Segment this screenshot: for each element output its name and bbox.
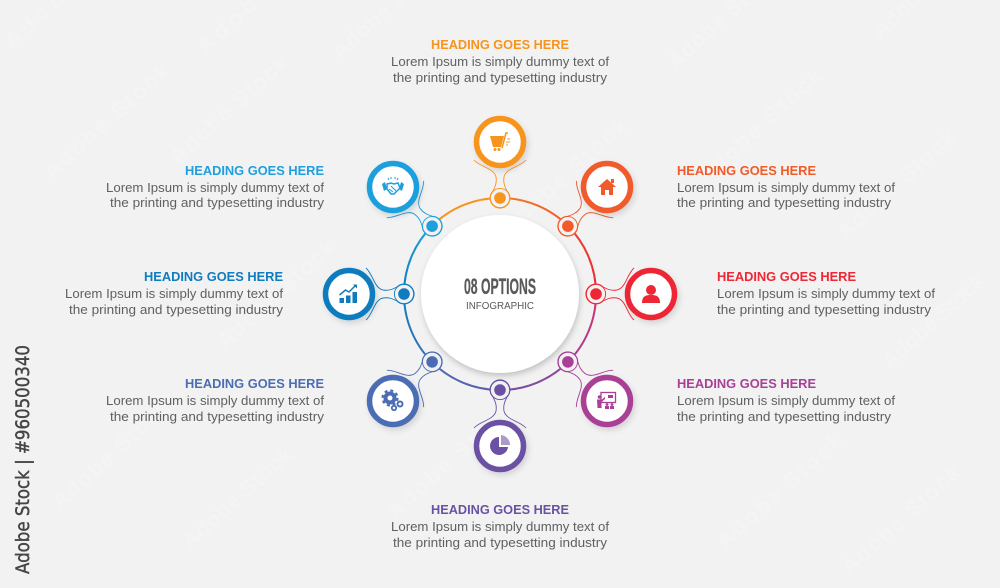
text block: top left: Lorem Ipsum is simply dummy text of — [106, 181, 325, 195]
center circle — [421, 215, 579, 373]
text block: right: Lorem Ipsum is simply dummy text of — [717, 287, 936, 301]
watermark pattern: Adobe Stock — [712, 428, 848, 554]
watermark pattern: Adobe Stock — [832, 124, 960, 244]
text block: bottom right: Lorem Ipsum is simply dummy text of — [677, 394, 896, 408]
text block: bottom left: the printing and typesetting industry — [110, 410, 325, 424]
watermark pattern: Adobe Stock — [39, 58, 175, 184]
text block: bottom: Lorem Ipsum is simply dummy text of — [391, 520, 610, 534]
text block: top right: HEADING GOES HERE — [677, 163, 816, 178]
text block: right — [717, 269, 936, 317]
icon: gears — [370, 378, 416, 424]
central ring — [404, 198, 596, 390]
text block: top left — [106, 163, 325, 210]
text block: top left: HEADING GOES HERE — [185, 163, 324, 178]
icon: pie chart — [476, 422, 524, 470]
text block: left: the printing and typesetting industry — [69, 303, 284, 317]
text block: top: HEADING GOES HERE — [431, 37, 569, 52]
text block: top: the printing and typesetting industry — [393, 71, 608, 85]
text block: top right — [677, 163, 896, 210]
watermark pattern: Adobe Stock — [47, 394, 175, 514]
text block: top right: Lorem Ipsum is simply dummy text of — [677, 181, 896, 195]
icon: growth chart — [326, 270, 372, 318]
text block: right: the printing and typesetting industry — [717, 303, 932, 317]
watermark pattern: Adobe Stock — [837, 459, 965, 579]
watermark pattern: Adobe Stock — [877, 268, 991, 374]
text block: bottom left: HEADING GOES HERE — [185, 376, 324, 391]
icon: presentation — [584, 378, 630, 424]
connector: right — [586, 268, 634, 320]
stock id vertical label: Adobe Stock | #960500340 — [12, 345, 34, 574]
connector: bottom right — [542, 336, 613, 407]
watermark pattern: Adobe Stock — [177, 441, 298, 554]
text block: top — [391, 37, 610, 85]
text block: bottom left — [106, 376, 325, 424]
text block: bottom left: Lorem Ipsum is simply dummy text of — [106, 394, 325, 408]
watermark pattern: Adobe Stock — [212, 234, 340, 354]
connector: top left — [387, 181, 458, 252]
connector: left — [366, 268, 414, 320]
text block: bottom right — [677, 376, 896, 424]
text block: top: Lorem Ipsum is simply dummy text of — [391, 55, 610, 69]
text block: left — [65, 269, 284, 317]
icon: handshake — [370, 164, 416, 210]
connector: bottom — [474, 380, 526, 428]
text block: top right: the printing and typesetting industry — [677, 196, 892, 210]
text block: top left: the printing and typesetting industry — [110, 196, 325, 210]
text block: left: Lorem Ipsum is simply dummy text of — [65, 287, 284, 301]
watermark pattern: Adobe Stock — [382, 398, 518, 524]
watermark pattern: Adobe Stock — [165, 49, 293, 169]
icon: house — [584, 164, 630, 210]
text block: bottom — [391, 502, 610, 550]
text block: bottom right: HEADING GOES HERE — [677, 376, 816, 391]
center title: 08 OPTIONS — [464, 274, 536, 299]
connector: top — [474, 160, 526, 208]
text block: bottom right: the printing and typesetting industry — [677, 410, 892, 424]
watermark pattern: Adobe Stock — [692, 63, 828, 189]
text block: bottom: HEADING GOES HERE — [431, 502, 569, 517]
icon: shopping cart — [476, 118, 524, 166]
icon: person — [628, 270, 674, 318]
text block: left: HEADING GOES HERE — [144, 269, 283, 284]
text block: right: HEADING GOES HERE — [717, 269, 856, 284]
watermark pattern: Adobe Stock — [497, 113, 633, 239]
connector: top right — [542, 181, 613, 252]
text block: bottom: the printing and typesetting industry — [393, 536, 608, 550]
center subtitle: INFOGRAPHIC — [466, 300, 534, 312]
connector: bottom left — [387, 336, 458, 407]
